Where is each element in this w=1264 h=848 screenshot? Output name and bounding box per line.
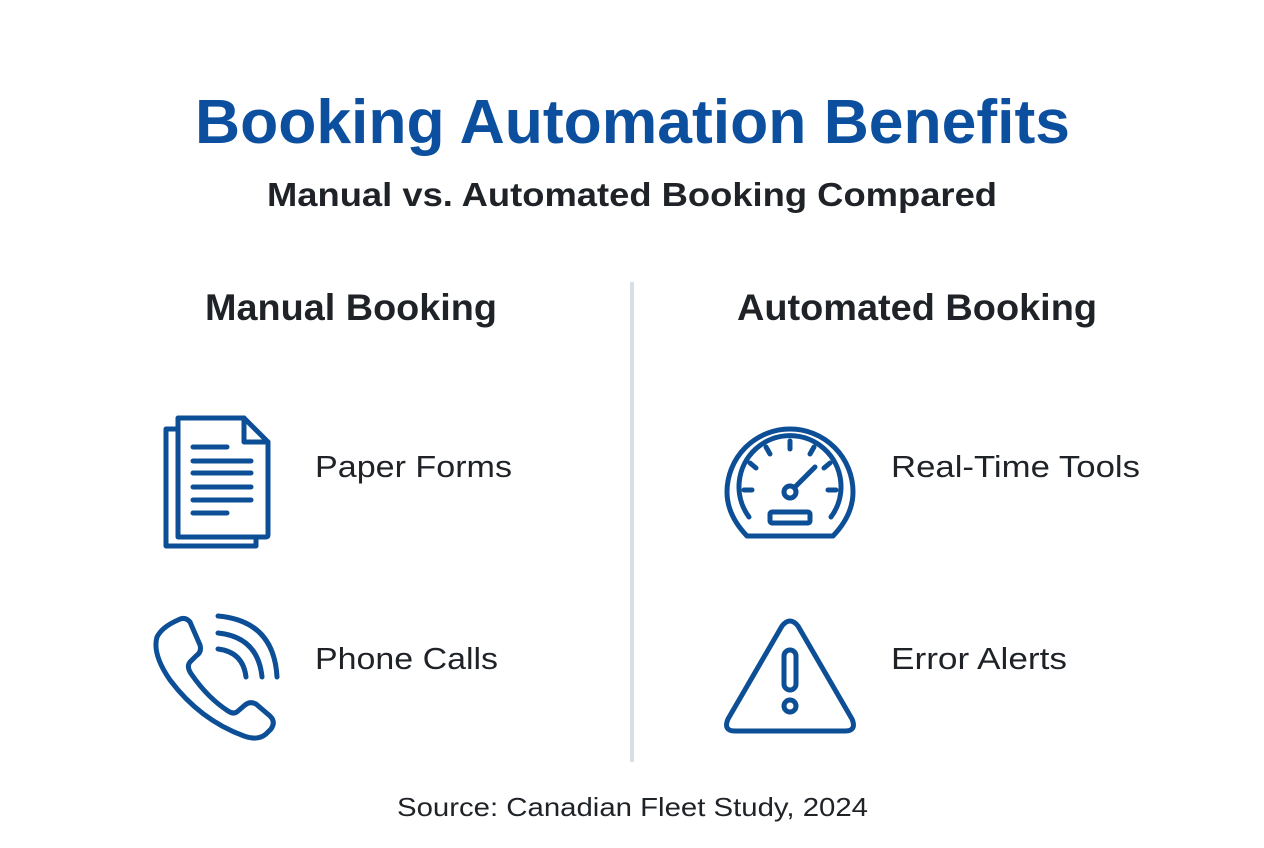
title: Booking Automation Benefits [195, 88, 1070, 157]
icon: warning triangle [727, 621, 853, 731]
icon: gauge [727, 429, 853, 536]
heading: automated booking: Automated Booking [737, 287, 1097, 328]
label: real-time tools: Real-Time Tools [891, 449, 1140, 484]
label: phone calls: Phone Calls [315, 641, 498, 676]
label: paper forms: Paper Forms [315, 449, 512, 484]
source footnote: Source: Canadian Fleet Study, 2024 [397, 792, 868, 822]
label: error alerts: Error Alerts [891, 641, 1067, 676]
icon: paper forms [166, 418, 268, 546]
subtitle: Manual vs. Automated Booking Compared [267, 176, 997, 213]
icon: phone [156, 616, 277, 738]
heading: manual booking: Manual Booking [205, 287, 497, 328]
